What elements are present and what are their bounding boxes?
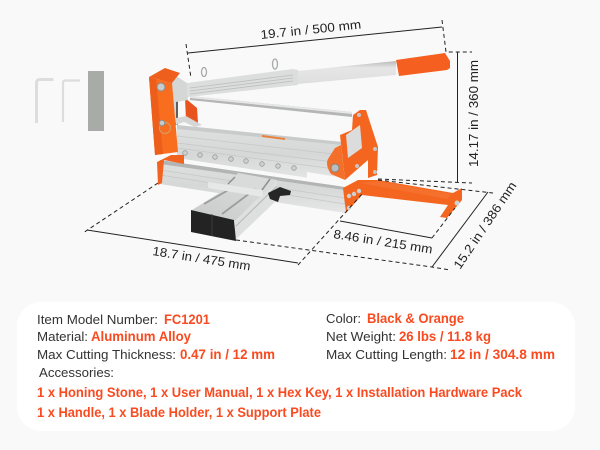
back hinge dark strip (172, 100, 178, 125)
dashed guides (83, 20, 493, 270)
pull ring (159, 120, 170, 134)
spec: net weight: 26 lbs / 11.8 kg (399, 329, 491, 344)
aluminium base rail (160, 160, 345, 213)
spec: material: Material: (37, 329, 88, 344)
plate bolts (355, 113, 377, 174)
orange logo strip (262, 135, 285, 140)
warning label (346, 125, 362, 158)
sliding fence crossing plate (208, 182, 263, 197)
spec: max cutting thickness: Max Cutting Thickness: (37, 347, 176, 362)
left orange column front (149, 77, 178, 155)
left orange column top (149, 68, 180, 83)
black clamp (268, 187, 291, 202)
right round flange (327, 145, 345, 180)
black end cap (191, 210, 236, 241)
icon: small hex key (63, 80, 80, 122)
ring pins on the handle (202, 59, 278, 76)
dimension label: front width: 18.7 in / 475 mm (152, 244, 252, 273)
main cutting head aluminium body (177, 125, 342, 183)
dimension label: depth: 15.2 in / 386 mm (451, 179, 520, 272)
dimension label: top width: 19.7 in / 500 mm (260, 18, 362, 42)
support arm bolts (347, 189, 460, 210)
dimension label: height: 14.17 in / 360 mm (467, 60, 481, 167)
cutter illustration (149, 53, 462, 241)
spec: max cutting length: 12 in / 304.8 mm (450, 347, 555, 362)
spec: material: Aluminum Alloy (91, 329, 191, 344)
spec: max cutting length: Max Cutting Length: (326, 347, 447, 362)
back left support plate (185, 98, 198, 123)
accessories list line 1: 1 x Honing Stone, 1 x User Manual, 1 x Hex Key, 1 x Installation Hardware Pack (37, 385, 522, 400)
spec: net weight: Net Weight: (326, 329, 396, 344)
accessories heading: Accessories: (39, 365, 114, 380)
dimension lines (83, 20, 493, 270)
white gap under the head (307, 172, 345, 187)
lever handle bar (187, 69, 298, 97)
panel: specifications (17, 302, 575, 431)
sliding fence extrusion (192, 180, 277, 221)
height line (456, 52, 458, 182)
spec: color: Black & Orange (367, 311, 464, 326)
front width line (87, 230, 298, 263)
orange grip (396, 53, 450, 76)
spec: color: Color: (326, 311, 361, 326)
spec: item model number: FC1201 (164, 312, 210, 327)
spec: max cutting thickness: 0.47 in / 12 mm (180, 347, 275, 362)
row of bolts on the cutting head (183, 151, 296, 170)
orange support arm (343, 180, 462, 218)
left base orange bracket (157, 155, 184, 185)
accessories list line 2: 1 x Handle, 1 x Blade Holder, 1 x Support Plate (37, 405, 321, 420)
top width line (188, 27, 442, 53)
sliding fence upper slide (229, 173, 277, 191)
icon: honing stone (88, 71, 104, 131)
dimension label: arm width: 8.46 in / 215 mm (333, 227, 433, 257)
spec: item model number: Item Model Number: (37, 312, 158, 327)
icon: large hex key (36, 80, 54, 123)
upper blade guide bar (190, 96, 352, 117)
hinge silver bracket (165, 74, 202, 127)
accessories: hex keys and honing stone (36, 71, 104, 131)
8.46 in line (340, 221, 432, 238)
right orange end plate (340, 110, 378, 180)
left bolt (157, 83, 165, 91)
depth line (432, 192, 488, 267)
